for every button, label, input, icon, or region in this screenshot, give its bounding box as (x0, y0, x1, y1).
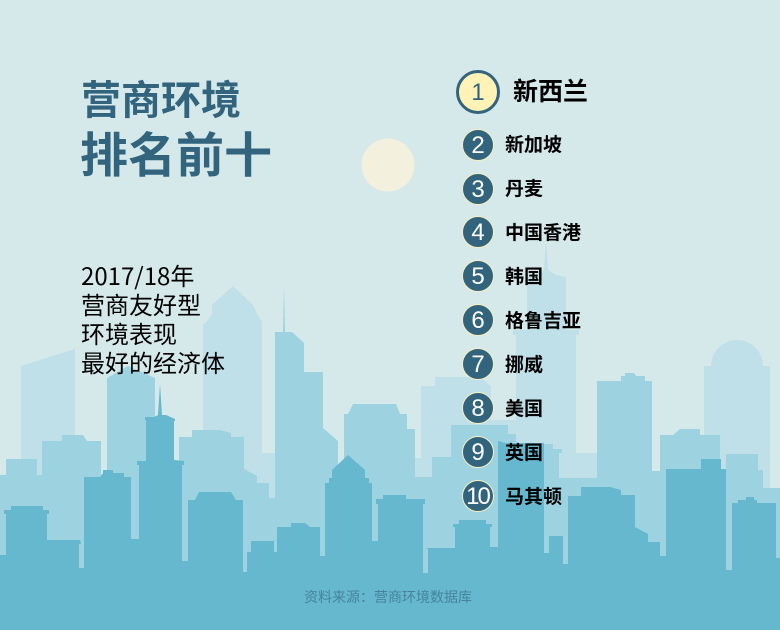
rank 8: 8 (471, 395, 485, 422)
rank 5: 韩国 (505, 262, 543, 289)
rank 10: 马其顿 (505, 482, 562, 509)
rank 8 (462, 392, 543, 424)
subtitle text block: 营商友好型 (81, 286, 201, 321)
rank 5: 5 (471, 263, 485, 290)
rank 8: 美国 (505, 394, 543, 421)
icon: sun (362, 138, 414, 192)
rank 4: 4 (471, 219, 485, 246)
rank 1: 1 (471, 79, 485, 106)
rank 7: 7 (471, 351, 485, 378)
rank 9: 英国 (505, 438, 543, 465)
rank 5 (462, 260, 543, 292)
subtitle text block (81, 257, 225, 379)
rank 10 (462, 480, 562, 512)
skyline: middle layer (0, 287, 780, 600)
title (80, 68, 272, 186)
rank 6: 格鲁吉亚 (505, 306, 581, 333)
rank 2 (462, 130, 562, 160)
subtitle text block: 最好的经济体 (81, 344, 225, 379)
rank 7 (462, 348, 543, 380)
rank 2: 新加坡 (505, 130, 562, 157)
rank 4 (462, 216, 581, 248)
skyline: front layer (0, 384, 780, 630)
skyline: back layer (21, 240, 770, 500)
rank 10: 10 (466, 483, 490, 510)
rank 3: 丹麦 (505, 174, 543, 201)
rank 3 (462, 174, 543, 204)
rank 6: 6 (471, 307, 485, 334)
title: 排名前十 (80, 116, 272, 186)
subtitle text block: 环境表现 (81, 315, 177, 350)
rank 2: 2 (471, 132, 485, 159)
subtitle text block: 2017/18年 (81, 257, 194, 292)
source note: 资料来源：营商环境数据库 (304, 587, 472, 607)
rank 1: 新西兰 (513, 72, 588, 108)
rank 1 (458, 72, 588, 112)
title: 营商环境 (81, 68, 241, 126)
rank 6 (462, 304, 581, 336)
rank 4: 中国香港 (505, 218, 581, 245)
rank 9: 9 (471, 439, 485, 466)
rank 3: 3 (471, 176, 485, 203)
rank 7: 挪威 (505, 350, 543, 377)
rank 9 (462, 436, 543, 468)
ranking list (458, 72, 588, 512)
